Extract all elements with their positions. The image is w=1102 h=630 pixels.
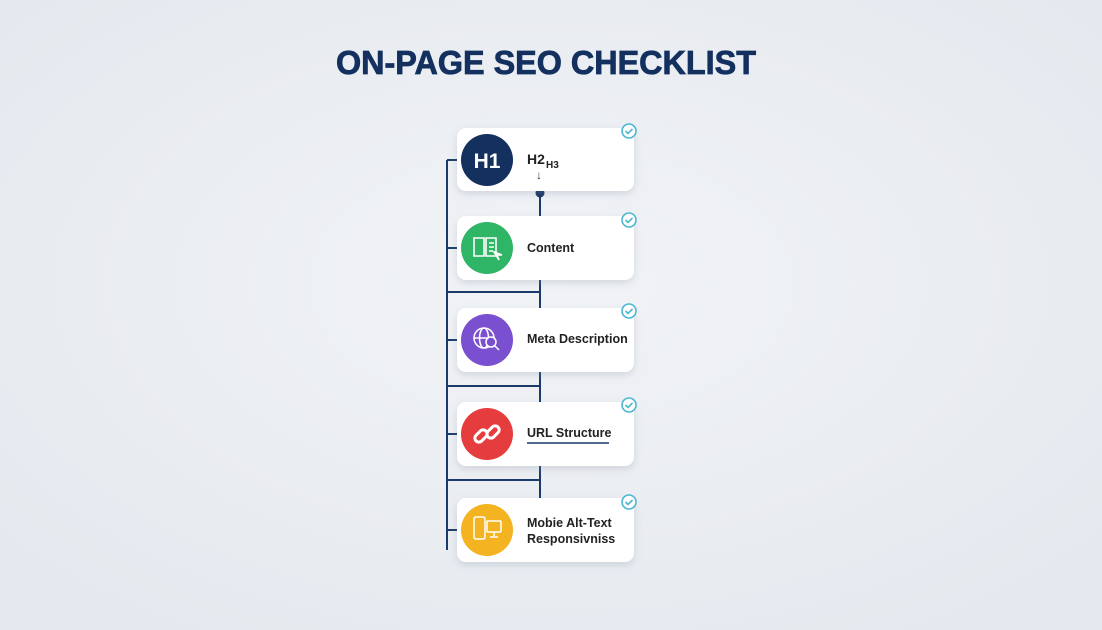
card: URL Structure: URL Structure (527, 426, 612, 440)
connector lines (447, 160, 540, 550)
connector dot (536, 188, 544, 198)
card: Content (457, 213, 636, 280)
card: H1 H2 H3: ↓ (536, 168, 542, 182)
card: Meta Description: Meta Description (527, 332, 628, 346)
title: ON-PAGE SEO CHECKLIST (336, 44, 756, 81)
card: Mobile Alt-Text: Mobie Alt-Text (527, 516, 613, 530)
card: Mobile Alt-Text (457, 495, 636, 562)
card: Meta Description (457, 304, 636, 372)
card: URL Structure (457, 398, 636, 466)
card: Mobile Alt-Text: Responsivniss (527, 532, 615, 546)
card: H1 H2 H3 (457, 124, 636, 191)
card: H1 H2 H3: H2 (527, 151, 545, 167)
card: Content: Content (527, 241, 575, 255)
card: H1 H2 H3: H1 (474, 150, 501, 173)
card: H1 H2 H3: H3 (546, 160, 559, 171)
